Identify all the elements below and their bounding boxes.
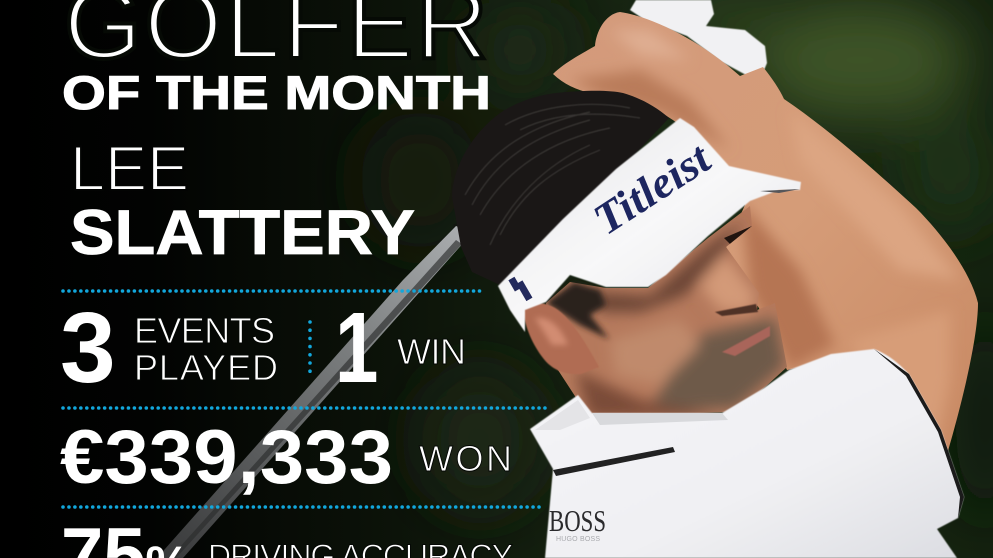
nose highlight xyxy=(700,255,755,312)
stat: events played: PLAYED xyxy=(134,347,278,388)
shirt logo xyxy=(549,503,606,543)
shirt logo: HUGO BOSS xyxy=(556,536,600,543)
dotted divider 2 xyxy=(63,406,546,410)
visor shadow on face xyxy=(590,220,745,312)
stat: wins xyxy=(335,293,466,404)
shirt logo: BOSS xyxy=(549,503,606,538)
stat: money won: WON xyxy=(419,438,512,479)
title: OF THE MONTH xyxy=(62,66,491,119)
stat: wins: WIN xyxy=(397,331,466,372)
visor side logo xyxy=(508,277,532,301)
dotted divider 3 xyxy=(63,505,540,509)
player name xyxy=(70,134,415,268)
vertical dotted divider xyxy=(308,322,312,372)
neck shade xyxy=(572,370,708,413)
stat: events played: 3 xyxy=(60,292,116,404)
sleeve piping xyxy=(874,349,964,518)
title xyxy=(62,0,491,119)
arm shading xyxy=(570,30,960,450)
player name: SLATTERY xyxy=(70,198,415,268)
stat: wins: 1 xyxy=(335,293,378,404)
player name: LEE xyxy=(70,134,189,204)
stat: driving accuracy xyxy=(61,513,513,558)
stat: money won: €339,333 xyxy=(60,415,393,500)
ear xyxy=(523,303,599,374)
white visor xyxy=(498,118,801,332)
golf club shaft xyxy=(157,226,473,558)
eye xyxy=(724,226,752,244)
hair xyxy=(454,90,669,342)
cheek xyxy=(610,320,700,385)
lips xyxy=(722,326,770,356)
glove xyxy=(595,0,767,82)
stubble xyxy=(650,318,785,410)
dotted divider 1 xyxy=(63,289,483,293)
visor logo: Titleist xyxy=(585,133,720,244)
arms and hands xyxy=(553,12,978,451)
stat: events played: EVENTS xyxy=(134,310,275,351)
nostril shadow xyxy=(715,304,758,316)
face xyxy=(546,206,787,414)
sideburn hair xyxy=(546,282,609,339)
collar shadow xyxy=(592,413,728,425)
golfer photo illustration xyxy=(440,0,990,558)
white polo shirt xyxy=(530,349,964,558)
stat: events played xyxy=(60,292,278,404)
